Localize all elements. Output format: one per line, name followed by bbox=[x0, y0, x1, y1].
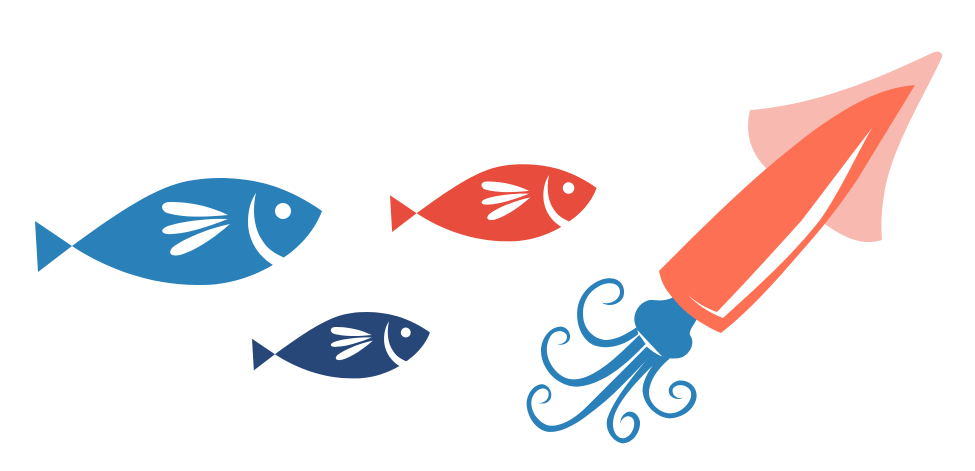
icon: squid bbox=[527, 52, 942, 443]
squid head and tentacles bbox=[527, 278, 697, 443]
squid body bbox=[659, 85, 915, 333]
icon: navy fish bbox=[252, 312, 430, 378]
squid fin bbox=[748, 52, 942, 242]
icon: large blue fish bbox=[35, 178, 322, 285]
squid body highlight bbox=[688, 128, 872, 318]
icon: red fish bbox=[390, 164, 597, 241]
